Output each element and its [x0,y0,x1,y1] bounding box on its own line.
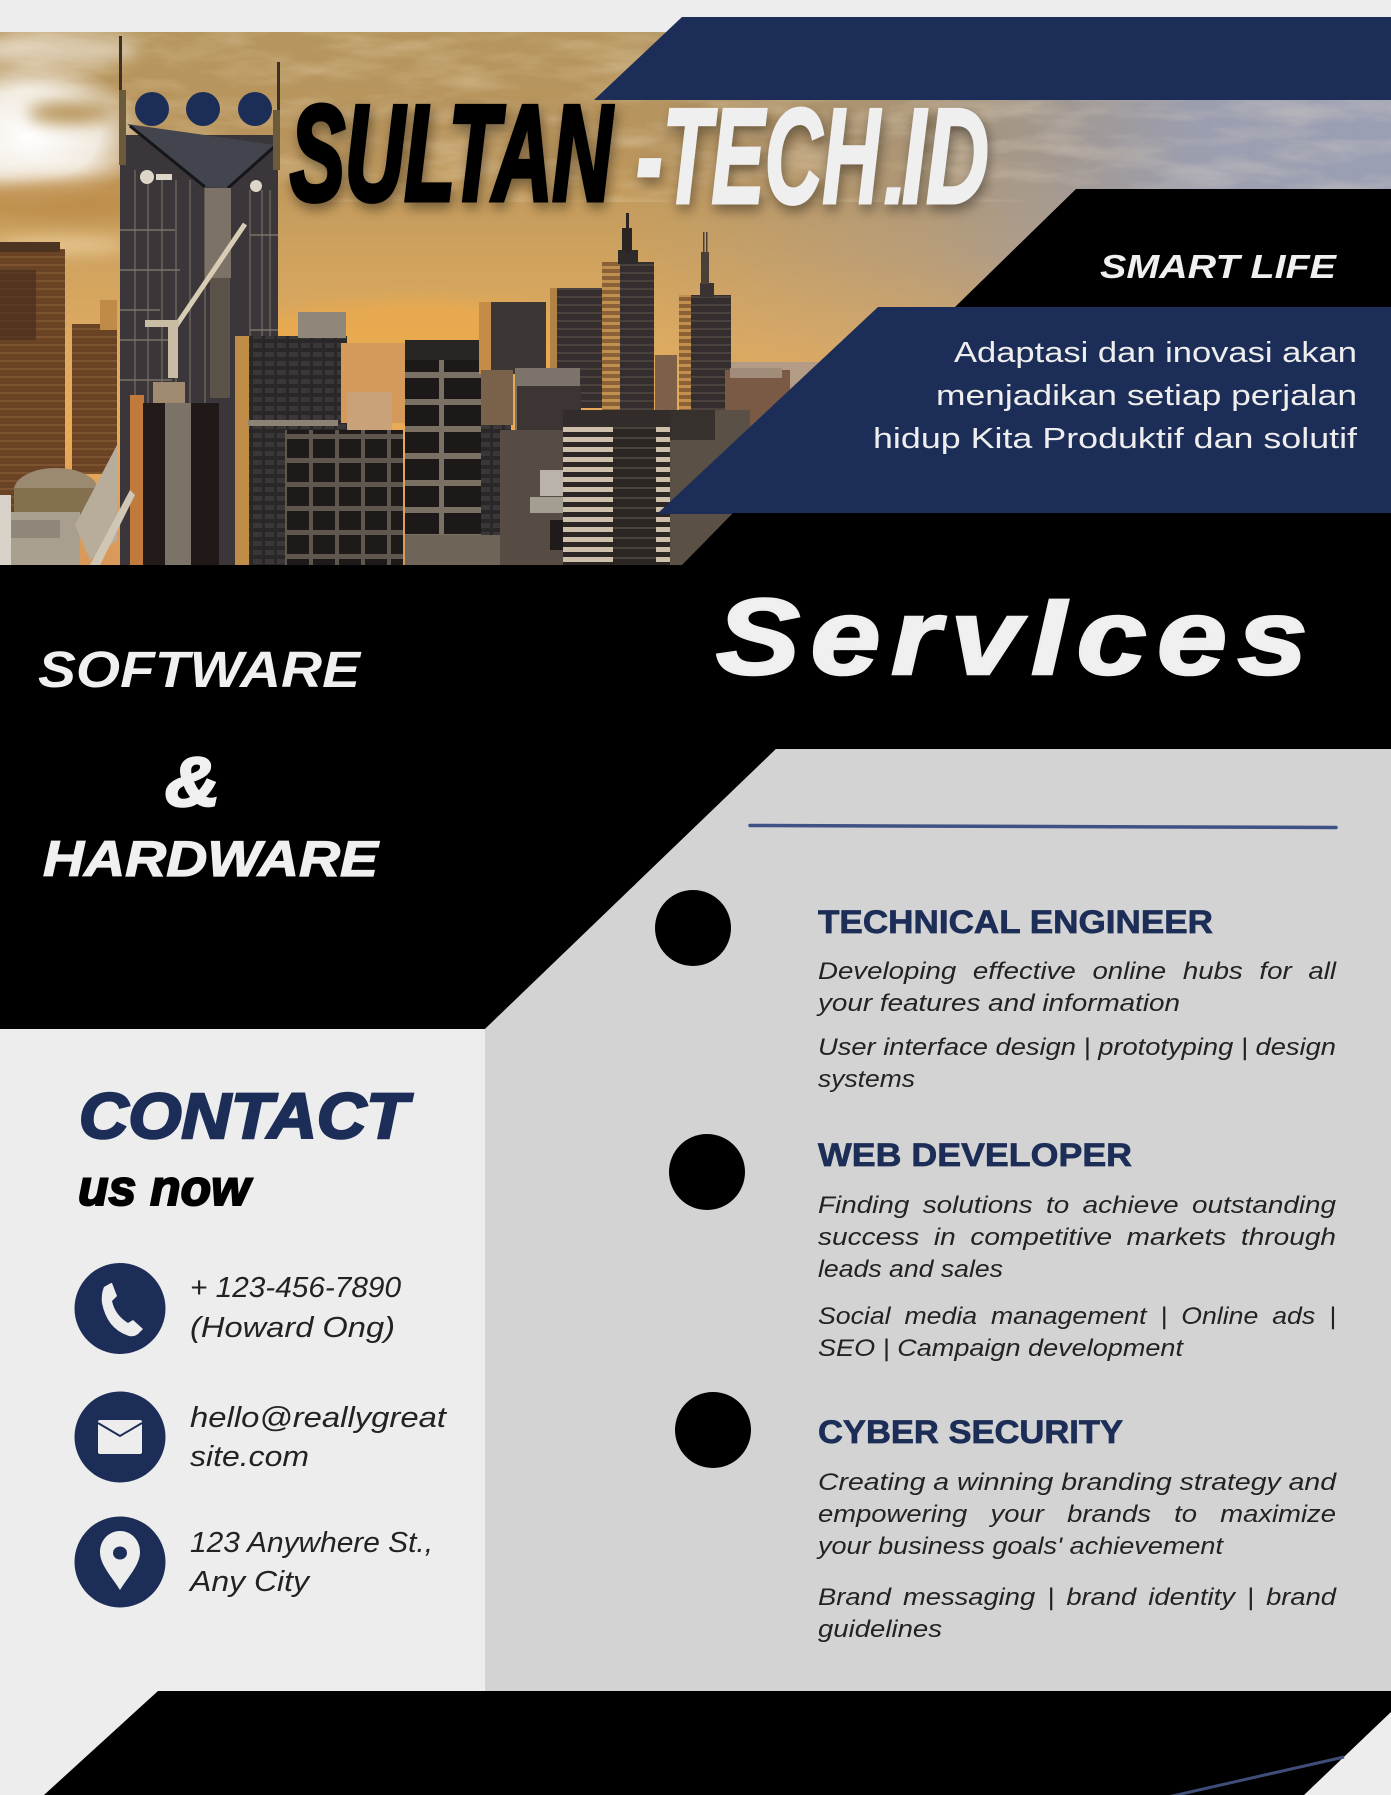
text: email: hello@reallygreat [190,1402,447,1434]
service: technical engineer: systems [818,1066,915,1093]
panel: black band [0,513,1391,1029]
service: cyber security: Brand messaging | brand identity | brand [818,1584,1338,1611]
service: cyber security: guidelines [818,1616,942,1643]
text: phone: (Howard Ong) [190,1312,395,1344]
title: -TECH.ID: D [926,80,989,232]
heading: us now: us now [78,1160,253,1216]
service: cyber security: Creating a winning branding strategy and [818,1469,1338,1496]
three navy dots [135,92,272,126]
text: address [188,1527,433,1598]
service: technical engineer: Developing effective online hubs for all [818,958,1337,985]
service: technical engineer [655,890,1337,1093]
tan building and grid blocks [341,343,407,423]
panel: services list [485,749,1391,1691]
text: address: Any City [188,1566,311,1598]
service: technical engineer: TECHNICAL ENGINEER [818,904,1213,940]
striped foreground tower [670,410,750,565]
service: web developer: WEB DEVELOPER [818,1137,1132,1173]
text: phone [190,1272,401,1344]
heading: software and hardware: & [165,743,220,821]
heading: software and hardware: SOFTWARE [38,641,362,698]
heading: contact: CONTACT [79,1080,413,1152]
heading: software and hardware [38,641,380,887]
front left buildings [153,382,185,403]
service: web developer: Social media management | Online ads | [818,1303,1336,1330]
photo: city skyline at sunset [0,32,1391,565]
main dark bank tower [120,135,278,565]
icon: phone [74,1263,166,1354]
tagline text: menjadikan setiap perjalan [936,380,1357,412]
icon: location pin [74,1516,166,1608]
service: web developer: Finding solutions to achieve outstanding [818,1192,1336,1219]
title: -TECH.ID: I [902,80,928,232]
navy top band [594,17,1391,100]
tagline text [873,337,1358,455]
title: SULTAN: SULTAN [290,77,614,229]
service: cyber security: your business goals' achievement [816,1533,1224,1560]
footer black band [44,1691,1391,1795]
service: web developer: SEO | Campaign development [818,1335,1184,1362]
service: cyber security: empowering your brands to maximize [818,1501,1336,1528]
title: -TECH.ID: -TECH [636,80,882,232]
service: cyber security [675,1392,1338,1643]
text: address: 123 Anywhere St., [190,1527,433,1559]
text: phone: + 123-456-7890 [190,1272,401,1304]
left background towers [0,249,65,539]
skyline towers [491,302,546,374]
service: technical engineer: your features and information [816,990,1180,1017]
panel: smart life [954,189,1391,308]
text: email: site.com [190,1441,309,1473]
heading: services: ServIces [716,576,1318,697]
tagline text: hidup Kita Produktif dan solutif [873,423,1358,455]
text: email [190,1402,447,1473]
service: technical engineer: User interface design | prototyping | design [818,1034,1336,1061]
panel: contact [74,1080,447,1608]
service: cyber security: CYBER SECURITY [818,1414,1123,1450]
tagline text: Adaptasi dan inovasi akan [954,337,1357,369]
dark glass office block [249,336,347,565]
title: -TECH.ID: . [884,118,906,224]
service: web developer: success in competitive markets through [818,1224,1336,1251]
heading: software and hardware: HARDWARE [43,831,380,887]
icon: mail [74,1392,166,1482]
heading: smart life: SMART LIFE [1100,248,1337,285]
panel: tagline [657,307,1391,514]
service: web developer: leads and sales [818,1256,1003,1283]
service: web developer [669,1134,1336,1362]
footer accent line [1168,1757,1344,1795]
